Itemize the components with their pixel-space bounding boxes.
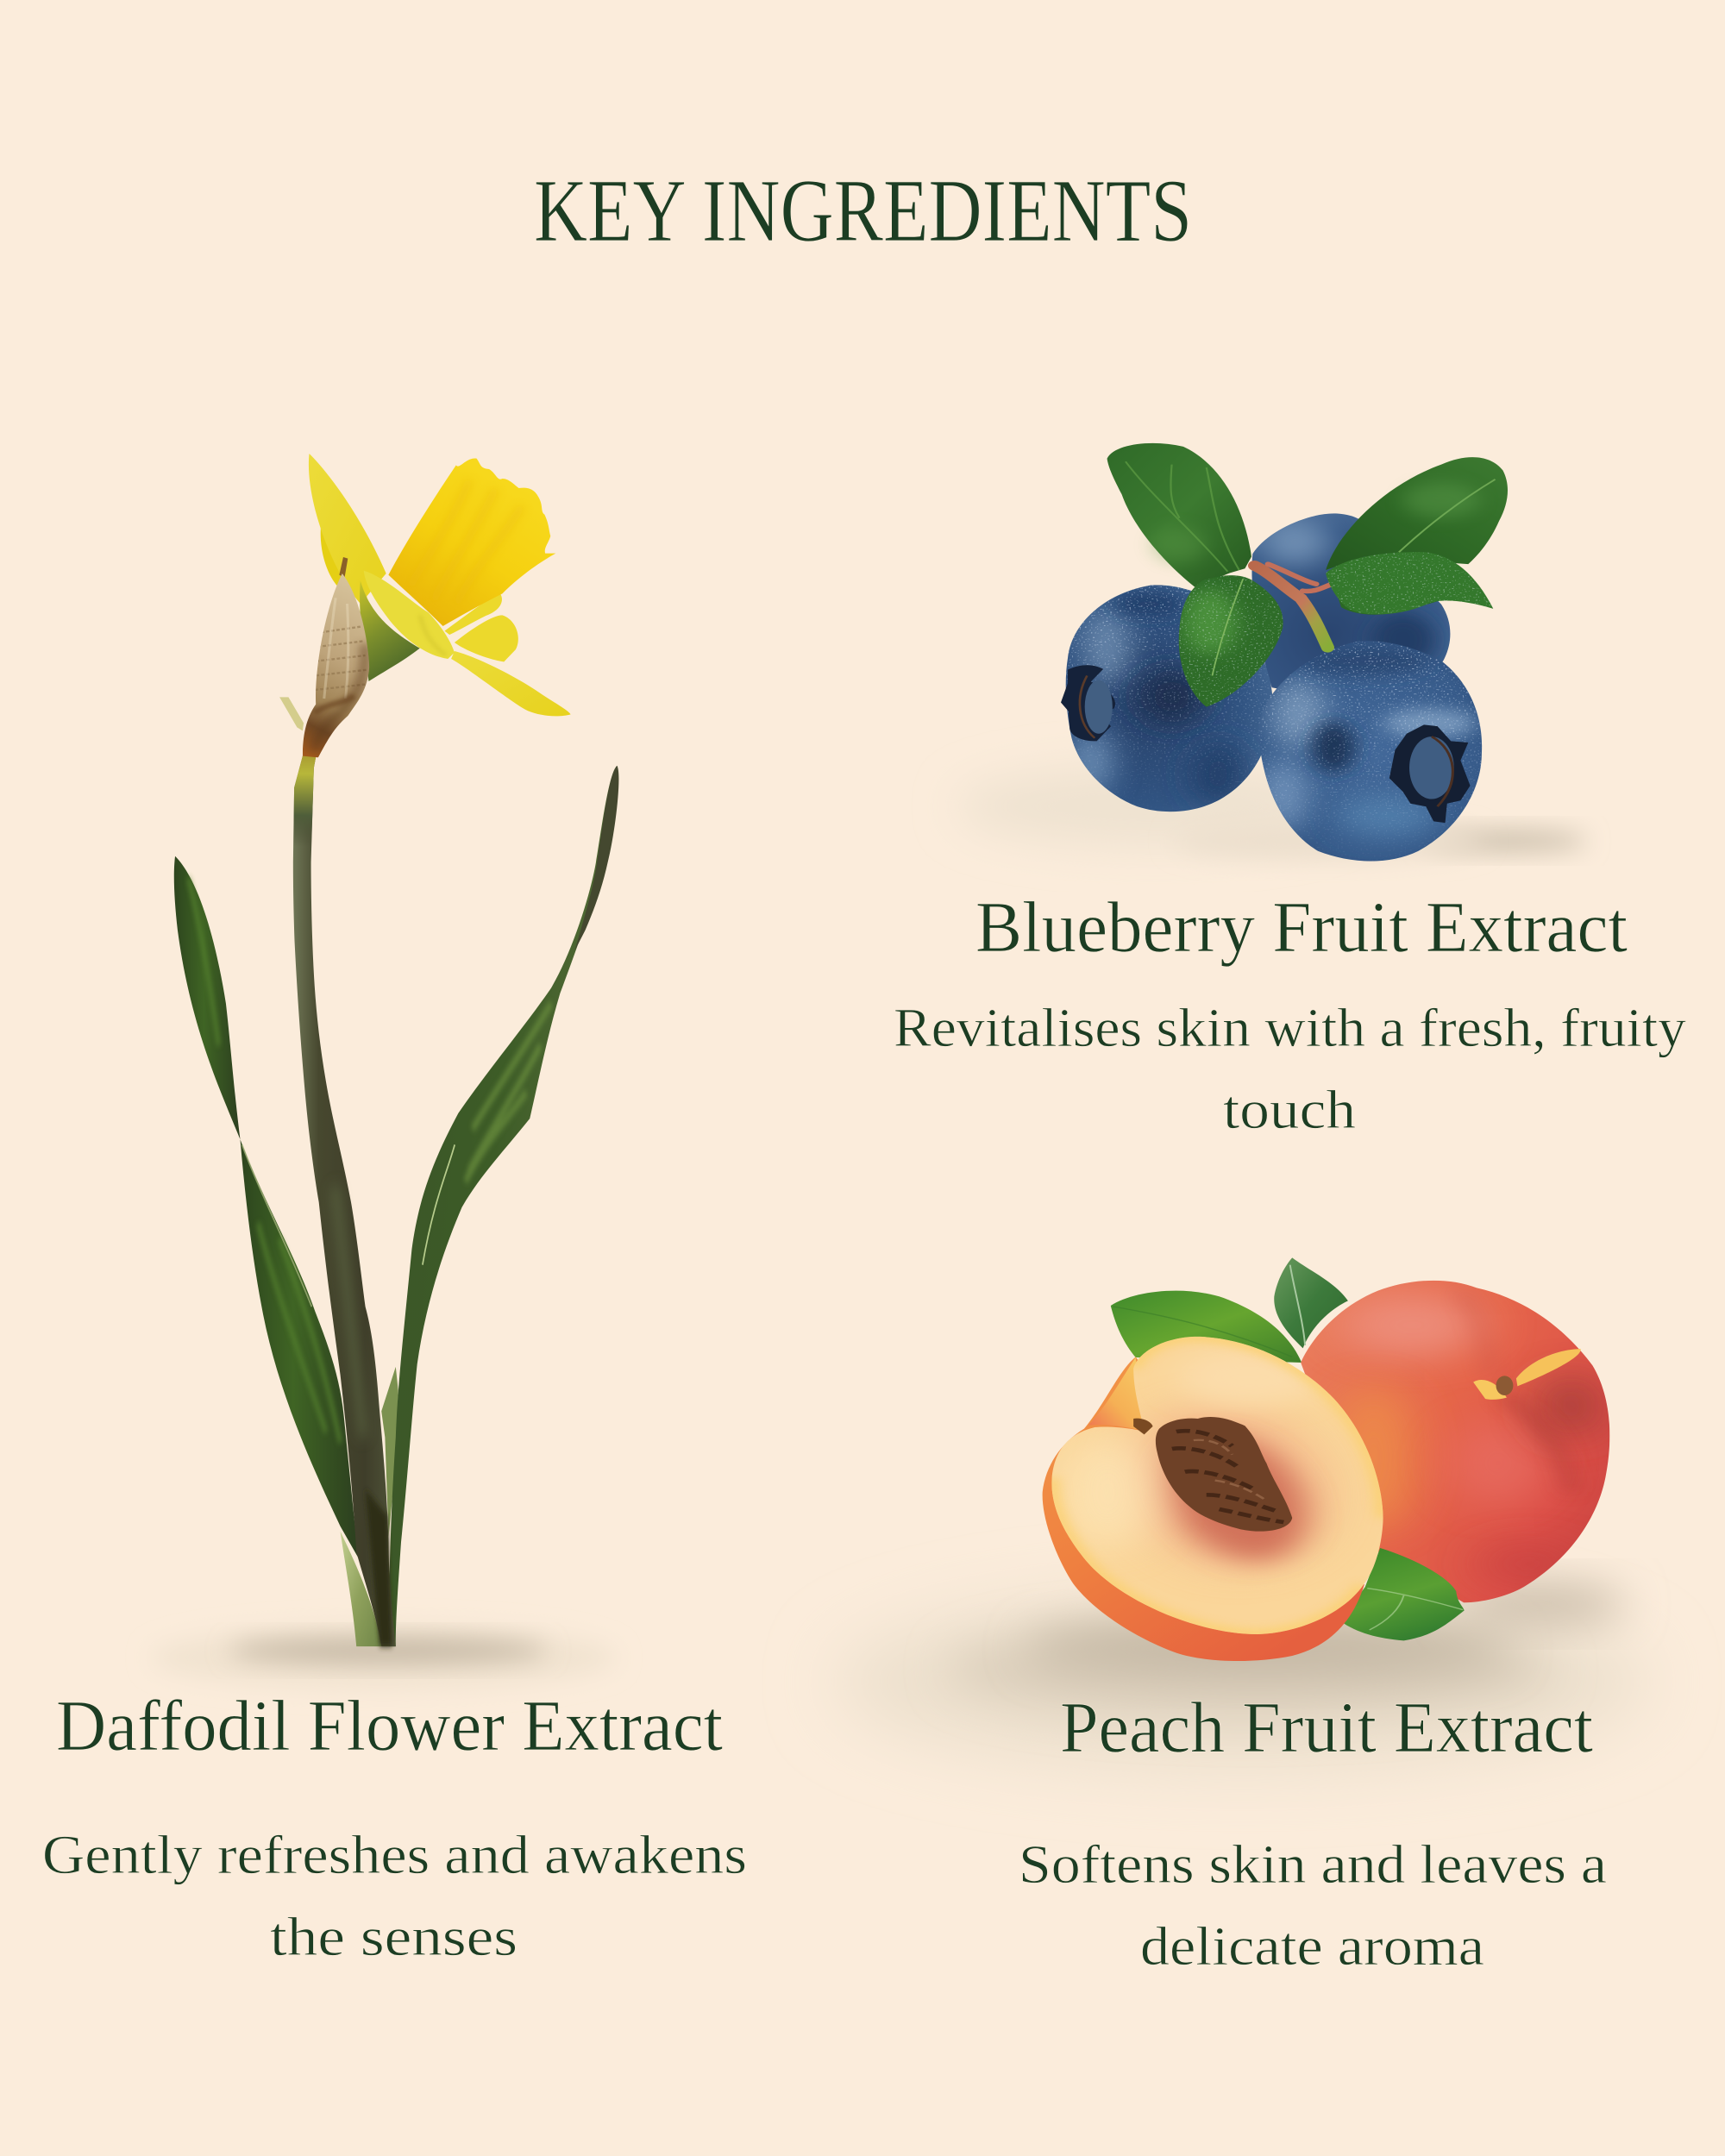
heading: blueberry: Blueberry Fruit Extract	[975, 887, 1628, 968]
leaf: top right	[1326, 457, 1508, 570]
berry: left	[1057, 580, 1280, 818]
panel: blueberry	[894, 443, 1687, 1140]
front petals	[364, 571, 571, 716]
panel: peach	[837, 1257, 1647, 1977]
illustration: blueberries	[1057, 443, 1508, 872]
leaf: center	[1178, 575, 1283, 707]
calyx: left berry	[1061, 665, 1115, 741]
peach stone	[1133, 1417, 1292, 1532]
right petals	[444, 592, 518, 661]
shadow: peach	[837, 1583, 1647, 1768]
twig	[1255, 564, 1330, 648]
trumpet	[388, 459, 555, 626]
description: daffodil: the senses	[270, 1907, 518, 1967]
berry: back	[1252, 513, 1451, 688]
green throat	[360, 580, 420, 681]
back petals	[309, 454, 386, 604]
description: blueberry	[894, 998, 1687, 1140]
peach cleft	[1516, 1349, 1581, 1386]
description: peach: delicate aroma	[1140, 1916, 1484, 1977]
leaf: left blade	[174, 856, 381, 1646]
description: blueberry: Revitalises skin with a fresh, fruity	[894, 998, 1687, 1058]
leaf: front right	[1326, 552, 1494, 615]
description: daffodil: Gently refreshes and awakens	[42, 1825, 747, 1885]
half peach skin crease	[1088, 1357, 1146, 1432]
calyx: front berry	[1389, 724, 1471, 823]
half peach skin	[1043, 1357, 1364, 1661]
half peach flesh	[1044, 1331, 1387, 1639]
description: daffodil	[42, 1825, 747, 1967]
description: peach: Softens skin and leaves a	[1019, 1834, 1607, 1895]
description: peach	[1019, 1834, 1607, 1977]
leaf: left	[1111, 1291, 1302, 1363]
title: KEY INGREDIENTS	[534, 161, 1192, 260]
panel: daffodil	[42, 454, 747, 1967]
flower stem	[293, 743, 396, 1646]
illustration: daffodil flower	[279, 454, 571, 761]
leaf: top left	[1107, 443, 1251, 587]
shadow: blueberry	[957, 768, 1587, 860]
papery spathe	[279, 557, 373, 761]
leaf: bottom	[1340, 1548, 1465, 1640]
whole peach	[1301, 1280, 1609, 1602]
description: blueberry: touch	[1223, 1080, 1356, 1140]
shadow: daffodil	[151, 1626, 617, 1689]
illustration: daffodil stem and leaves	[174, 743, 618, 1646]
leaf: small sheath	[381, 1367, 398, 1537]
leaf: top	[1274, 1257, 1348, 1348]
heading: daffodil: Daffodil Flower Extract	[56, 1686, 723, 1766]
infographic canvas	[45, 181, 1685, 1965]
illustration: peaches	[1043, 1257, 1622, 1661]
berry: front	[1259, 642, 1482, 862]
leaf: right blade	[389, 766, 618, 1646]
heading: peach: Peach Fruit Extract	[1060, 1688, 1593, 1768]
